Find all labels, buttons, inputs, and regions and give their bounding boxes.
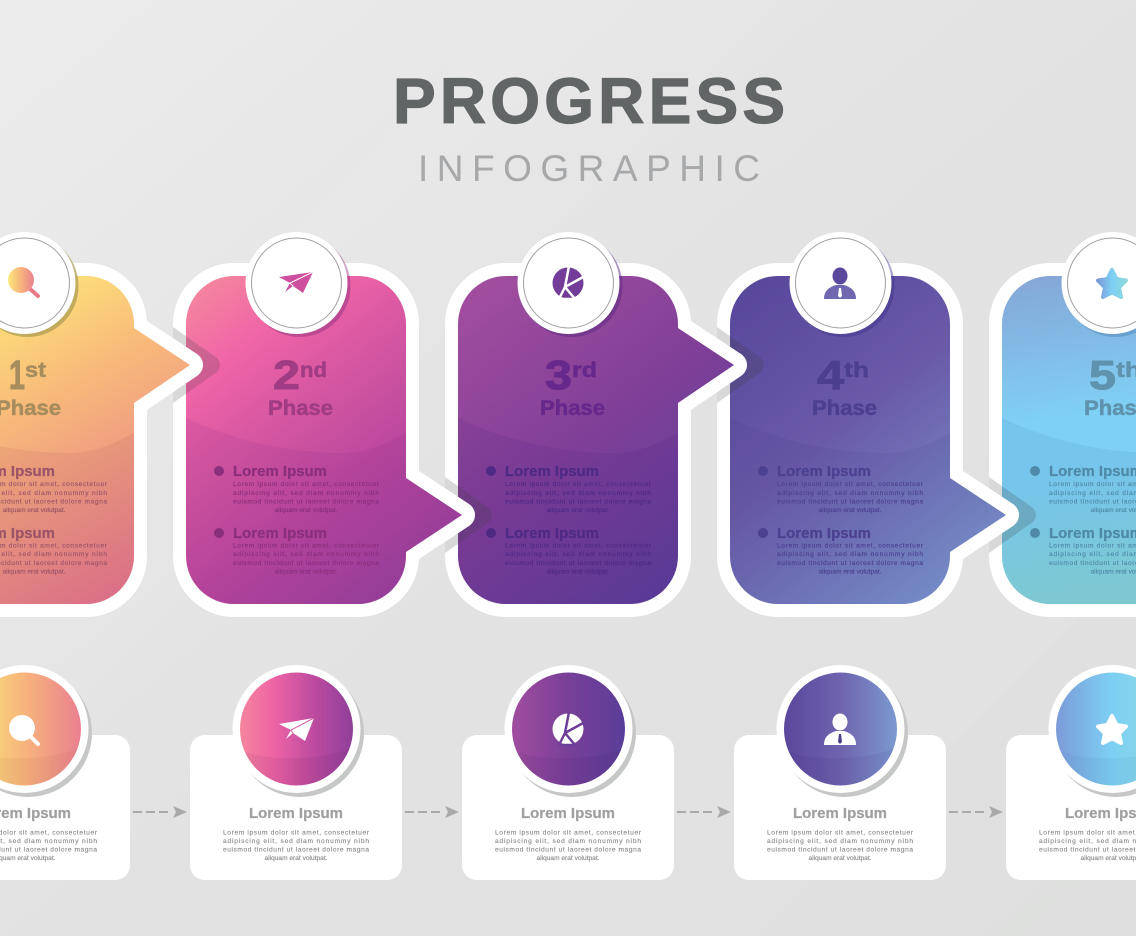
phase label: th <box>1116 359 1136 382</box>
text block 1 <box>1030 463 1136 514</box>
text block 2: aliquam erat volutpat. <box>2 568 66 576</box>
text block 1: Lorem Ipsum <box>505 463 599 480</box>
phase label <box>812 352 877 420</box>
phase label: 5 <box>1089 352 1116 398</box>
icon disc: star <box>1048 665 1136 797</box>
info card: euismod tincidunt ut laoreet dolore magna <box>495 846 641 854</box>
arrow shadow <box>173 327 220 403</box>
text block 2: adipiscing elit, sed diam nonummy nibh <box>777 551 923 558</box>
arrow shadow <box>445 477 492 553</box>
info card: Lorem Ipsum <box>521 805 615 822</box>
text block 2: euismod tincidunt ut laoreet dolore magna <box>505 560 651 567</box>
text block 2: euismod tincidunt ut laoreet dolore magna <box>233 560 379 567</box>
icon disc: pie chart <box>504 665 636 797</box>
phase label: th <box>844 359 869 382</box>
phase label: 3 <box>545 352 572 398</box>
text block 1: Lorem ipsum dolor sit amet, consectetuer <box>505 481 652 488</box>
info card: Lorem ipsum dolor sit amet, consectetuer <box>767 830 914 836</box>
text block 1: aliquam erat volutpat. <box>2 507 66 514</box>
text block 2 <box>214 525 380 576</box>
phase label: 2 <box>273 352 300 398</box>
icon disc: person <box>776 665 908 797</box>
text block 2: aliquam erat volutpat. <box>818 568 882 576</box>
bottom step 2 <box>190 665 459 880</box>
text block 1: Lorem Ipsum <box>233 463 327 480</box>
phase label <box>268 352 333 420</box>
text block 2: aliquam erat volutpat. <box>546 568 610 576</box>
phase label: 1 <box>9 352 25 398</box>
phase label: rd <box>572 359 597 382</box>
arrow: dashed <box>949 806 1003 818</box>
text block 1: adipiscing elit, sed diam nonummy nibh <box>233 490 379 497</box>
info card: aliquam erat volutpat. <box>808 855 872 862</box>
phase label <box>540 352 605 420</box>
icon badge: person <box>790 232 894 337</box>
text block 2 <box>0 525 108 576</box>
arrow: dashed <box>133 806 187 818</box>
panel: 4th phase <box>724 232 1036 620</box>
info card: Lorem ipsum dolor sit amet, consectetuer <box>223 830 370 836</box>
subheading: infographic: INFOGRAPHIC <box>418 148 760 189</box>
phase label: Phase <box>540 397 605 420</box>
text block 2 <box>486 525 652 576</box>
info card: aliquam erat volutpat. <box>536 855 600 862</box>
icon badge: star <box>1062 232 1136 337</box>
panel: 3rd phase <box>452 232 764 620</box>
phase label: Phase <box>268 397 333 420</box>
text block 1: euismod tincidunt ut laoreet dolore magna <box>505 498 651 506</box>
text block 1: aliquam erat volutpat. <box>274 507 338 514</box>
card shape <box>0 276 208 620</box>
bottom step 1 <box>0 665 187 880</box>
card shape <box>452 276 752 620</box>
text block 1: euismod tincidunt ut laoreet dolore magna <box>777 498 923 506</box>
phase label: 4 <box>817 352 844 398</box>
text block 2 <box>1030 525 1136 576</box>
info card: adipiscing elit, sed diam nonummy nibh <box>767 838 913 845</box>
info card: Lorem Ipsum <box>249 805 343 822</box>
text block 2: Lorem ipsum dolor sit amet, consectetuer <box>777 542 924 550</box>
arrow shadow <box>717 327 764 403</box>
text block 1: Lorem ipsum dolor sit amet, consectetuer <box>233 481 380 488</box>
panel: 2nd phase <box>180 232 492 620</box>
info card <box>0 735 130 880</box>
icon badge: magnifier <box>0 232 78 337</box>
info card: aliquam erat volutpat. <box>264 855 328 862</box>
info card: Lorem Ipsum <box>793 805 887 822</box>
heading: progress: PROGRESS <box>393 65 785 137</box>
card shape <box>180 276 480 620</box>
info card <box>1006 735 1136 880</box>
bottom step 5 <box>1006 665 1136 880</box>
icon badge: paper plane <box>246 232 350 337</box>
text block 2: Lorem Ipsum <box>505 525 599 542</box>
text block 1: aliquam erat volutpat. <box>818 507 882 514</box>
text block 1 <box>486 463 652 514</box>
text block 1: Lorem Ipsum <box>777 463 871 480</box>
icon disc: magnifier <box>0 665 92 797</box>
panel: 5th phase <box>996 232 1136 620</box>
info card <box>462 735 674 880</box>
text block 2: aliquam erat volutpat. <box>274 568 338 576</box>
text block 2: Lorem Ipsum <box>777 525 871 542</box>
text block 1 <box>0 463 108 514</box>
bottom step 4 <box>734 665 1003 880</box>
arrow: dashed <box>677 806 731 818</box>
info card: euismod tincidunt ut laoreet dolore magna <box>223 846 369 854</box>
phase label <box>1084 352 1136 420</box>
panel: 1st phase <box>0 232 220 620</box>
text block 1 <box>214 463 380 514</box>
card shape <box>996 276 1136 620</box>
card shape <box>724 276 1024 620</box>
info card <box>734 735 946 880</box>
title <box>393 65 785 189</box>
text block 1 <box>758 463 924 514</box>
info card: adipiscing elit, sed diam nonummy nibh <box>223 838 369 845</box>
phase label: Phase <box>812 397 877 420</box>
text block 2 <box>758 525 924 576</box>
bottom step 3 <box>462 665 731 880</box>
phase label <box>0 352 61 420</box>
text block 2: adipiscing elit, sed diam nonummy nibh <box>233 551 379 558</box>
info card <box>190 735 402 880</box>
text block 2: adipiscing elit, sed diam nonummy nibh <box>505 551 651 558</box>
text block 2: Lorem ipsum dolor sit amet, consectetuer <box>505 542 652 550</box>
phase label: nd <box>300 359 327 382</box>
text block 1: adipiscing elit, sed diam nonummy nibh <box>505 490 651 497</box>
text block 1: aliquam erat volutpat. <box>546 507 610 514</box>
arrow: dashed <box>405 806 459 818</box>
text block 2: Lorem Ipsum <box>233 525 327 542</box>
icon disc: paper plane <box>232 665 364 797</box>
icon badge: pie chart <box>518 232 622 337</box>
arrow shadow <box>989 477 1036 553</box>
text block 2: Lorem ipsum dolor sit amet, consectetuer <box>233 542 380 550</box>
text block 1: adipiscing elit, sed diam nonummy nibh <box>777 490 923 497</box>
text block 2: euismod tincidunt ut laoreet dolore magna <box>777 560 923 567</box>
info card: euismod tincidunt ut laoreet dolore magna <box>767 846 913 854</box>
phase label: st <box>25 359 46 382</box>
info card: Lorem ipsum dolor sit amet, consectetuer <box>495 830 642 836</box>
text block 1: euismod tincidunt ut laoreet dolore magna <box>233 498 379 506</box>
info card: adipiscing elit, sed diam nonummy nibh <box>495 838 641 845</box>
text block 1: Lorem ipsum dolor sit amet, consectetuer <box>777 481 924 488</box>
